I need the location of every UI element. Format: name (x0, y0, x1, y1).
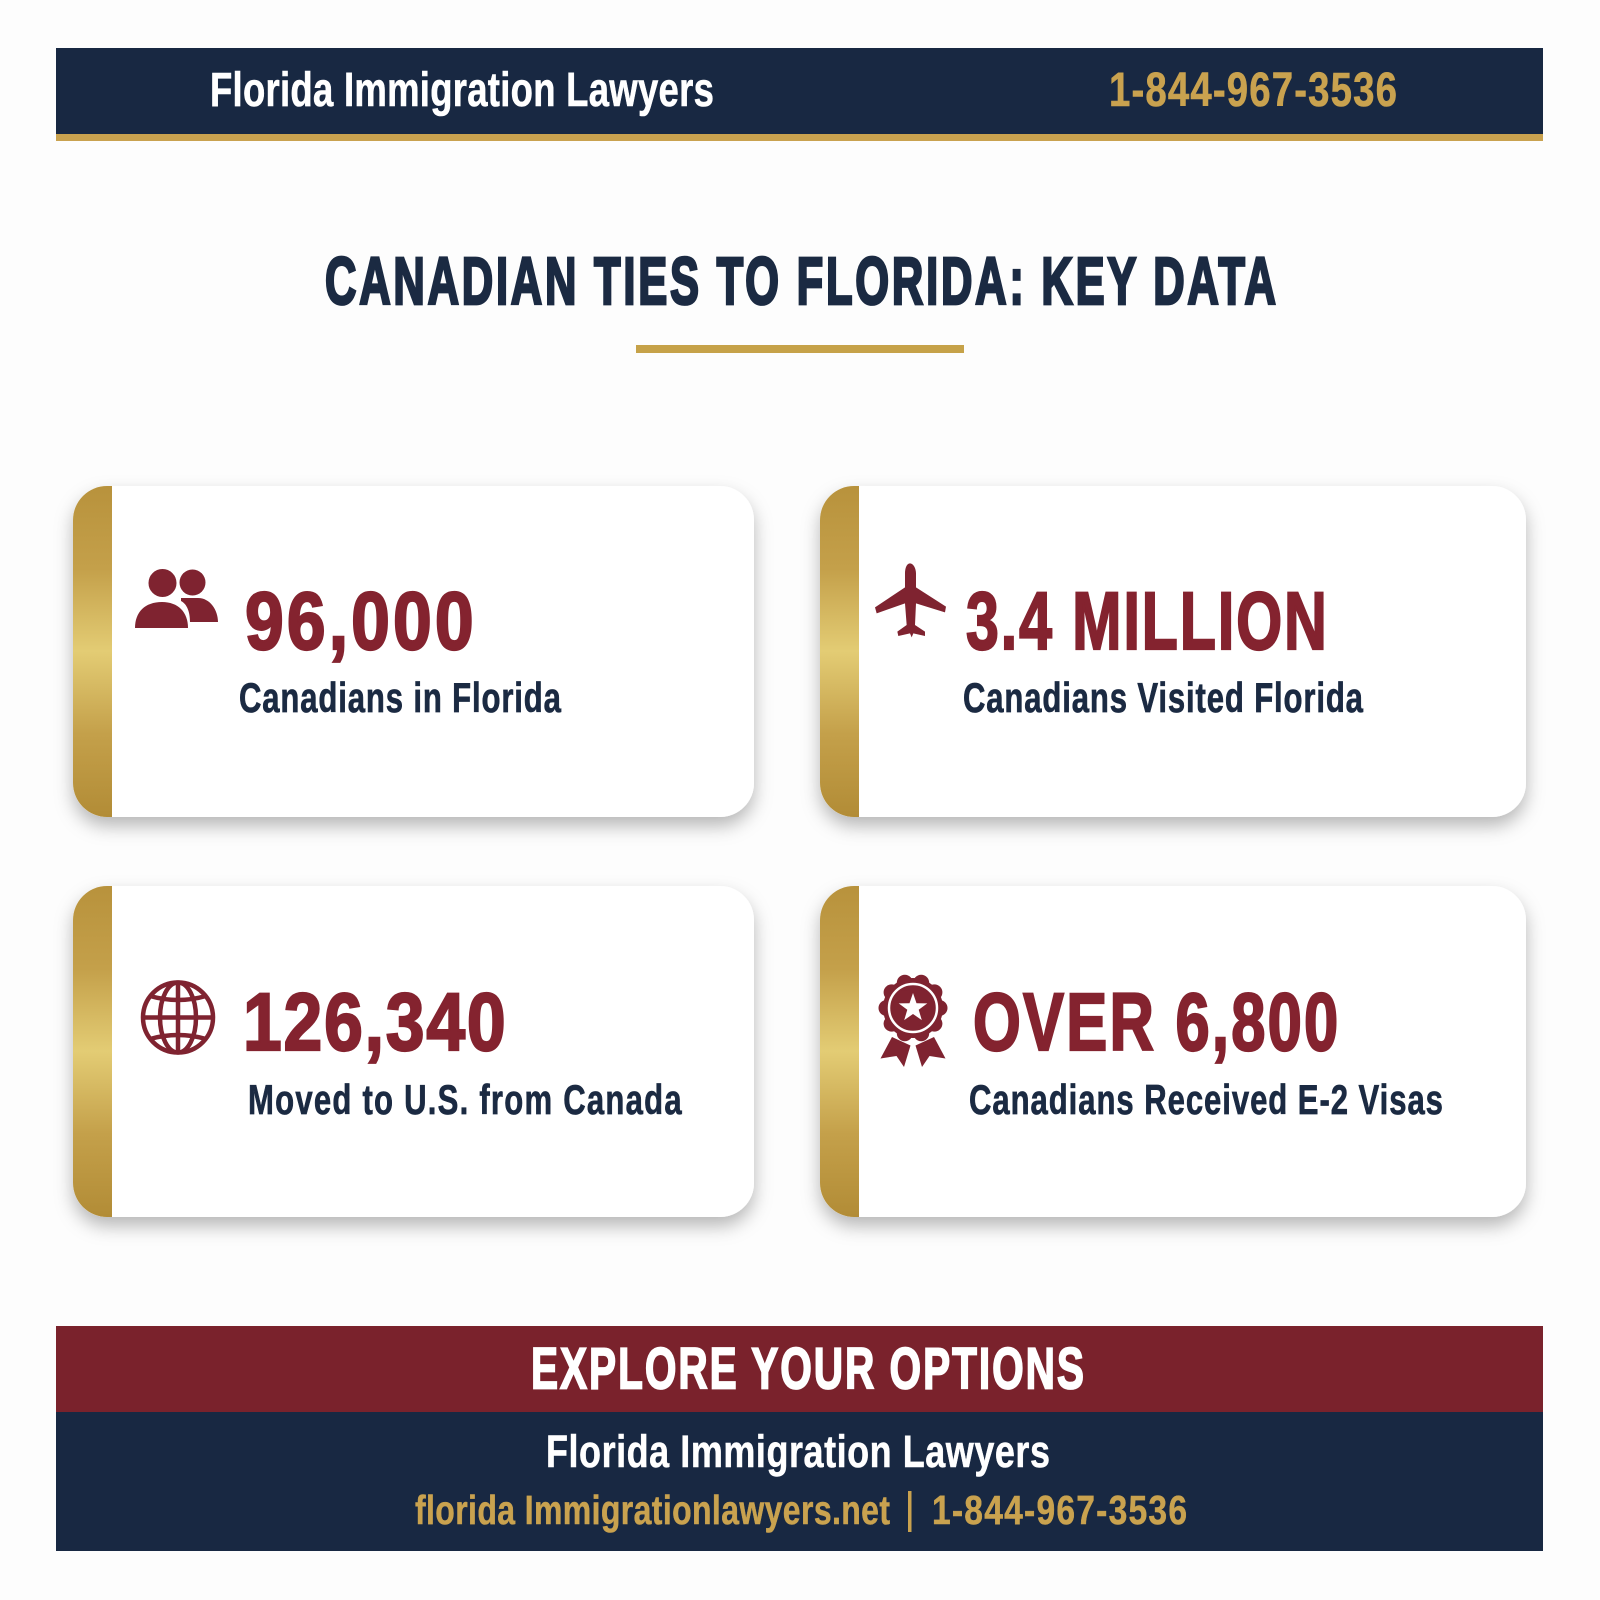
icon: people (135, 568, 218, 628)
panel: Canadians visited Florida (820, 486, 1526, 817)
header bar (56, 48, 1543, 141)
header firm name: Florida Immigration Lawyers (210, 63, 714, 117)
panel: E-2 visas (820, 886, 1526, 1217)
footer separator (908, 1491, 912, 1532)
footer website: florida Immigrationlawyers.net (415, 1487, 890, 1533)
footer phone number: 1-844-967-3536 (932, 1487, 1187, 1533)
footer call to action (56, 1326, 1543, 1551)
label: Canadians Visited Florida: Canadians Visited Florida (963, 674, 1363, 721)
title underline (636, 345, 964, 353)
label: Moved to U.S. from Canada: Moved to U.S. from Canada (248, 1076, 682, 1123)
stat: over 6,800: OVER 6,800 (973, 976, 1338, 1068)
footer firm name: Florida Immigration Lawyers (546, 1426, 1050, 1477)
stat: 126,340: 126,340 (243, 977, 506, 1068)
icon: award rosette (878, 975, 948, 1067)
label: Canadians in Florida: Canadians in Florida (239, 674, 561, 721)
panel: Canadians in Florida (73, 486, 754, 817)
panel: Moved to U.S. from Canada (73, 886, 754, 1217)
label: Canadians Received E-2 Visas: Canadians Received E-2 Visas (969, 1076, 1443, 1123)
stat: 3.4 million: 3.4 MILLION (966, 576, 1327, 667)
icon: airplane (875, 563, 946, 637)
footer heading: EXPLORE YOUR OPTIONS (531, 1336, 1084, 1401)
header phone number: 1-844-967-3536 (1109, 64, 1397, 117)
icon: globe (143, 982, 213, 1053)
title: CANADIAN TIES TO FLORIDA: KEY DATA (325, 244, 1276, 318)
stat: 96,000: 96,000 (245, 576, 474, 667)
